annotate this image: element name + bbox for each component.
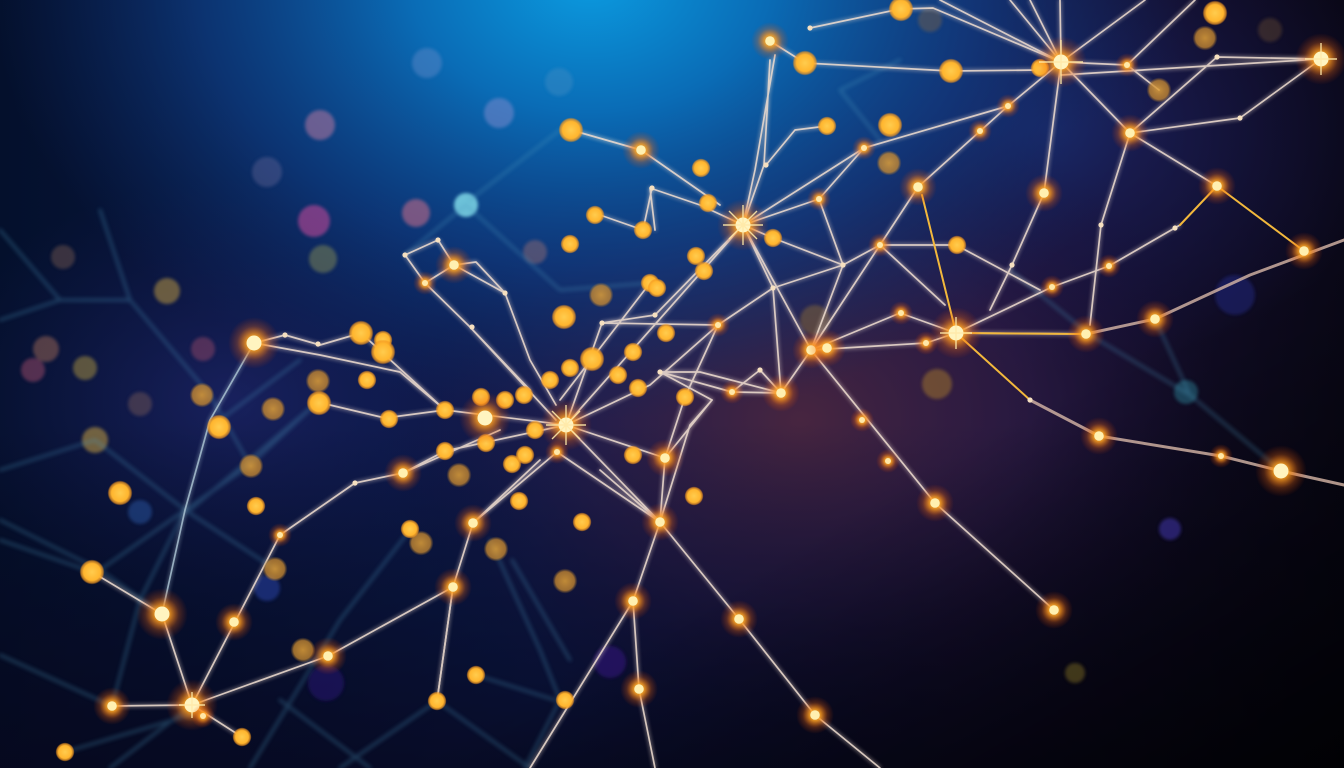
- dim amber nodes: [190, 26, 1218, 662]
- gold highlighted lines: [922, 186, 1344, 485]
- small junction nodes: [282, 25, 1243, 486]
- amber bokeh nodes: [80, 0, 1228, 710]
- star spikes on hubs: [179, 40, 1337, 718]
